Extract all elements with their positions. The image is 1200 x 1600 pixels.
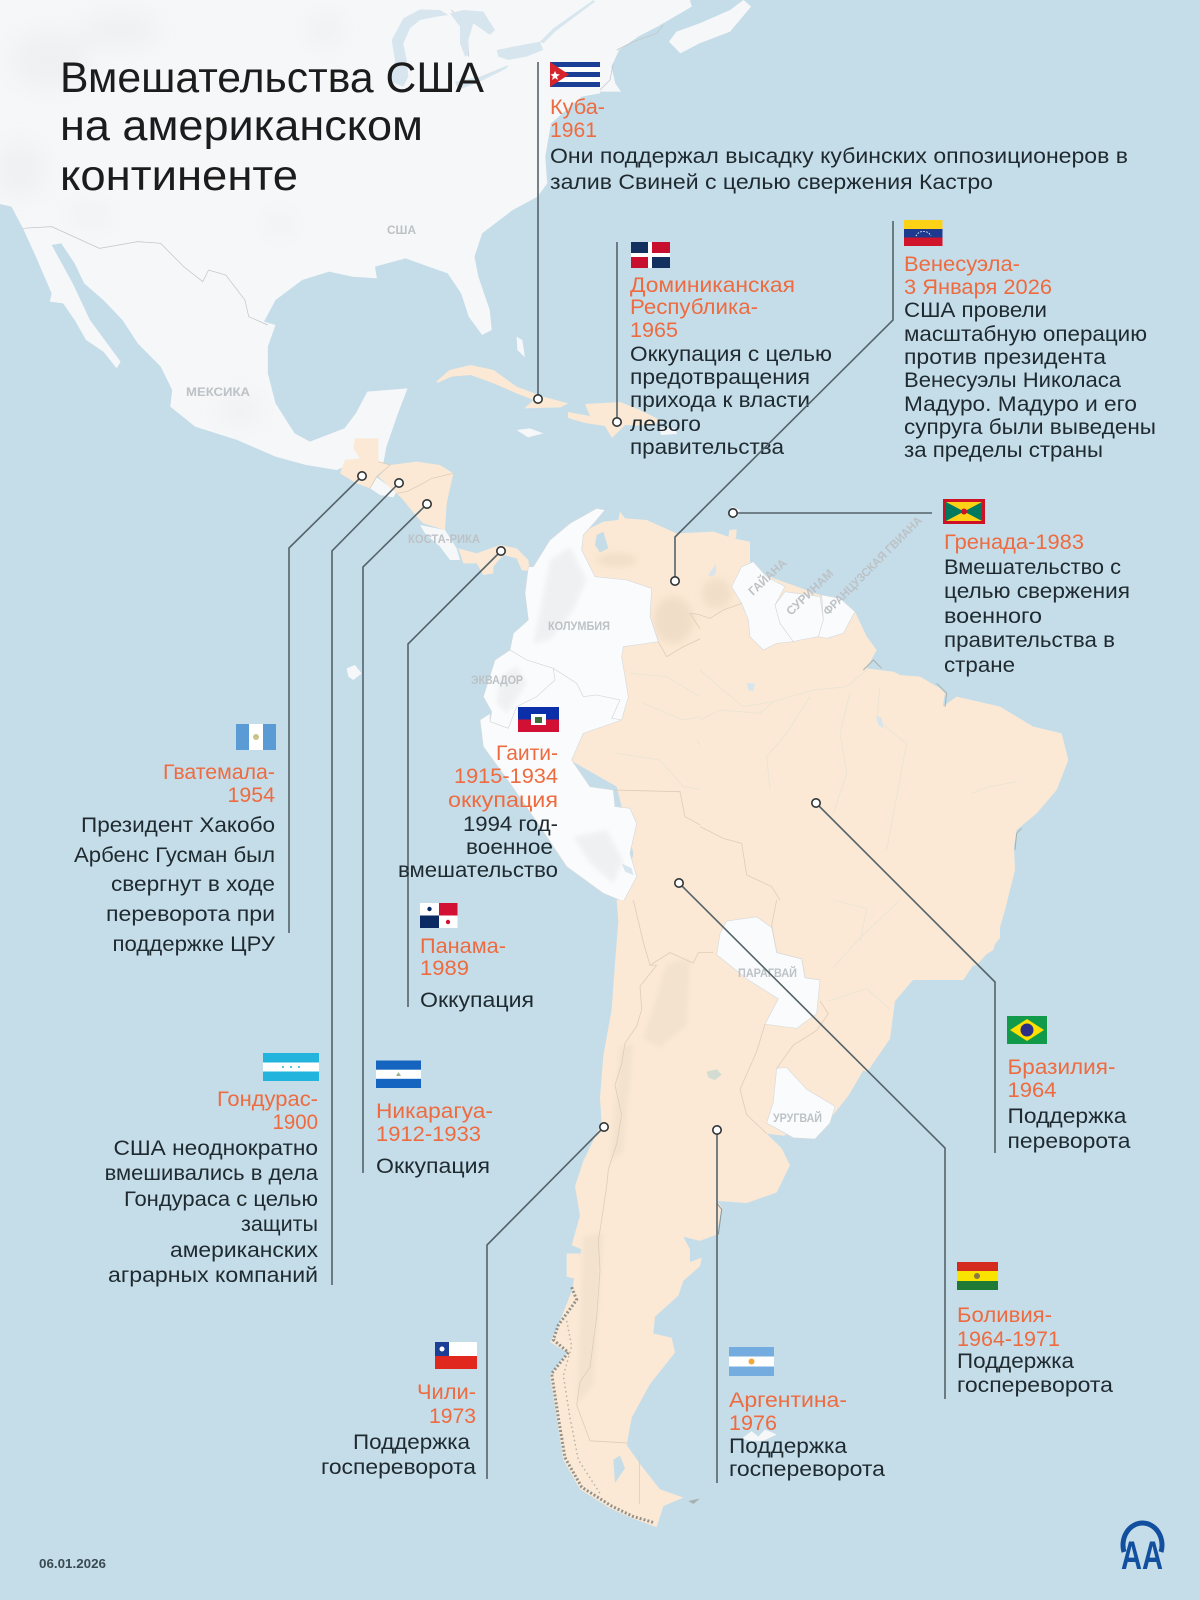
callout: Chile: Поддержка bbox=[353, 1431, 470, 1454]
callout: Brazil bbox=[812, 799, 1131, 1153]
flag: Argentina bbox=[729, 1347, 774, 1376]
callout: Guatemala: свергнут в ходе bbox=[111, 873, 275, 896]
callout: Honduras: защиты bbox=[241, 1213, 318, 1236]
flag: Dominican Republic bbox=[631, 242, 670, 268]
date: 06.01.2026 bbox=[39, 1556, 106, 1571]
callout: Honduras: аграрных компаний bbox=[108, 1264, 318, 1287]
callout: Dominican Republic: прихода к власти bbox=[630, 389, 810, 412]
callout: Haiti bbox=[398, 707, 559, 882]
callout: Nicaragua: 1912-1933 bbox=[376, 1123, 481, 1146]
title: континенте bbox=[60, 152, 298, 200]
map: north america land bbox=[0, 0, 751, 470]
flag: Panama bbox=[420, 903, 458, 928]
callout: Guatemala: Арбенс Гусман был bbox=[74, 844, 275, 867]
callout: Bolivia: Боливия- bbox=[957, 1304, 1052, 1327]
flag: Bolivia bbox=[957, 1262, 998, 1290]
flag: Venezuela bbox=[904, 220, 942, 246]
callout: Argentina: госпереворота bbox=[729, 1458, 885, 1481]
callout: Grenada: целью свержения bbox=[944, 580, 1130, 603]
callout: Brazil: Бразилия- bbox=[1008, 1056, 1116, 1079]
callout: Nicaragua bbox=[363, 500, 493, 1178]
logo: Anadolu Agency: AA bbox=[1121, 1534, 1163, 1578]
callout: Honduras: вмешивались в дела bbox=[105, 1162, 318, 1185]
callout: Honduras: США неоднократно bbox=[114, 1137, 318, 1160]
map country labels bbox=[186, 223, 925, 1125]
callout: Venezuela: за пределы страны bbox=[904, 439, 1103, 462]
callout: Dominican Republic: Доминиканская bbox=[630, 274, 795, 297]
callout: Haiti: вмешательство bbox=[398, 859, 558, 882]
callout: Honduras: Гондурас- bbox=[217, 1088, 318, 1111]
callout: Honduras: американских bbox=[170, 1239, 319, 1262]
map: central america and caribbean bbox=[340, 365, 740, 680]
callout: Venezuela: 3 Января 2026 bbox=[904, 276, 1052, 299]
map country labels: ПАРАГВАЙ bbox=[738, 965, 797, 980]
callout: Chile bbox=[321, 1123, 608, 1479]
callout: Panama: Оккупация bbox=[420, 989, 534, 1012]
callout: Honduras: Гондураса с целью bbox=[124, 1188, 318, 1211]
callout: Dominican Republic: правительства bbox=[630, 436, 784, 459]
callout: Argentina: 1976 bbox=[729, 1412, 777, 1435]
title: на американском bbox=[60, 102, 423, 150]
callout: Dominican Republic: 1965 bbox=[630, 319, 678, 342]
callout: Grenada: правительства в bbox=[944, 629, 1115, 652]
callout: Cuba: 1961 bbox=[550, 119, 597, 142]
callout: Brazil: 1964 bbox=[1008, 1079, 1057, 1102]
callout: Nicaragua: Никарагуа- bbox=[376, 1100, 493, 1123]
callout: Haiti: военное bbox=[466, 836, 553, 859]
map country labels: СУРИНАМ bbox=[783, 566, 836, 618]
callout: Dominican Republic bbox=[613, 242, 832, 459]
callout: Venezuela: Мадуро. Мадуро и его bbox=[904, 393, 1137, 416]
flag: Haiti bbox=[518, 707, 559, 732]
logo: Anadolu Agency bbox=[1121, 1523, 1163, 1578]
callout: Haiti: Гаити- bbox=[496, 742, 558, 765]
flag: Guatemala bbox=[236, 724, 276, 750]
callout: Dominican Republic: Оккупация с целью bbox=[630, 343, 832, 366]
callout: Dominican Republic: предотвращения bbox=[630, 366, 810, 389]
callout: Cuba: Они поддержал высадку кубинских оппозиционеров в bbox=[550, 145, 1128, 168]
callout: Haiti: 1994 год- bbox=[463, 813, 558, 836]
flag: Chile bbox=[435, 1342, 477, 1369]
flag: Honduras bbox=[263, 1053, 319, 1081]
callout: Cuba bbox=[534, 62, 1128, 403]
callout: Honduras: 1900 bbox=[272, 1111, 318, 1134]
callout: Bolivia: госпереворота bbox=[957, 1374, 1113, 1397]
callout: Venezuela: супруга были выведены bbox=[904, 416, 1156, 439]
callout: Guatemala: Гватемала- bbox=[163, 761, 275, 784]
callout: Guatemala bbox=[74, 472, 366, 956]
callout: Venezuela: США провели bbox=[904, 299, 1047, 322]
title: Вмешательства США bbox=[60, 54, 484, 102]
callout: Argentina: Поддержка bbox=[729, 1435, 847, 1458]
map country labels: МЕКСИКА bbox=[186, 385, 250, 399]
callout: Grenada: военного bbox=[944, 605, 1042, 628]
callout: Grenada: стране bbox=[944, 654, 1015, 677]
callout: Venezuela: Венесуэла- bbox=[904, 253, 1020, 276]
callout: Grenada bbox=[729, 499, 1130, 677]
callout: Argentina: Аргентина- bbox=[729, 1389, 847, 1412]
flag: Cuba bbox=[550, 62, 600, 87]
flag: Grenada bbox=[943, 499, 985, 524]
callout: Grenada: Гренада-1983 bbox=[944, 531, 1084, 554]
callout: Bolivia: 1964-1971 bbox=[957, 1328, 1060, 1351]
map country labels: КОСТА-РИКА bbox=[408, 532, 480, 546]
callout: Brazil: Поддержка bbox=[1008, 1105, 1127, 1128]
callout: Bolivia bbox=[675, 879, 1113, 1399]
map country labels: США bbox=[387, 223, 416, 237]
callout: Panama: 1989 bbox=[420, 957, 469, 980]
callout: Panama bbox=[408, 547, 534, 1012]
callout: Haiti: оккупация bbox=[448, 789, 558, 812]
callout: Dominican Republic: левого bbox=[630, 413, 701, 436]
callout: Guatemala: Президент Хакобо bbox=[81, 814, 275, 837]
callout: Grenada: Вмешательство с bbox=[944, 556, 1121, 579]
callout: Venezuela: Венесуэлы Николаса bbox=[904, 369, 1121, 392]
callout: Chile: 1973 bbox=[429, 1405, 476, 1428]
callout: Bolivia: Поддержка bbox=[957, 1350, 1074, 1373]
flag: Brazil bbox=[1007, 1016, 1047, 1044]
callout: Nicaragua: Оккупация bbox=[376, 1155, 490, 1178]
callout: Cuba: Куба- bbox=[550, 96, 605, 119]
callout: Guatemala: 1954 bbox=[228, 784, 275, 807]
flag: Nicaragua bbox=[376, 1060, 421, 1088]
callout: Guatemala: поддержке ЦРУ bbox=[112, 933, 276, 956]
callout: Venezuela: против президента bbox=[904, 346, 1106, 369]
title bbox=[60, 54, 484, 200]
callout: Panama: Панама- bbox=[420, 935, 506, 958]
callout: Guatemala: переворота при bbox=[106, 903, 275, 926]
callout: Chile: госпереворота bbox=[321, 1456, 476, 1479]
map country labels: УРУГВАЙ bbox=[773, 1110, 822, 1125]
callout: Argentina bbox=[713, 1126, 885, 1483]
callout: Dominican Republic: Республика- bbox=[630, 296, 758, 319]
map country labels: ГАЙАНА bbox=[745, 555, 790, 598]
map country labels: ФРАНЦУЗСКАЯ ГВИАНА bbox=[820, 513, 925, 618]
map country labels: ЭКВАДОР bbox=[471, 673, 523, 687]
callout: Chile: Чили- bbox=[417, 1381, 476, 1404]
callout: Cuba: залив Свиней с целью свержения Кастро bbox=[550, 171, 993, 194]
callout: Venezuela bbox=[671, 220, 1156, 585]
callout: Honduras bbox=[105, 479, 403, 1287]
map: south america bbox=[480, 508, 1068, 1527]
callout: Venezuela: масштабную операцию bbox=[904, 323, 1147, 346]
callout: Brazil: переворота bbox=[1008, 1130, 1131, 1153]
map country labels: КОЛУМБИЯ bbox=[548, 619, 610, 633]
callout: Haiti: 1915-1934 bbox=[454, 765, 558, 788]
